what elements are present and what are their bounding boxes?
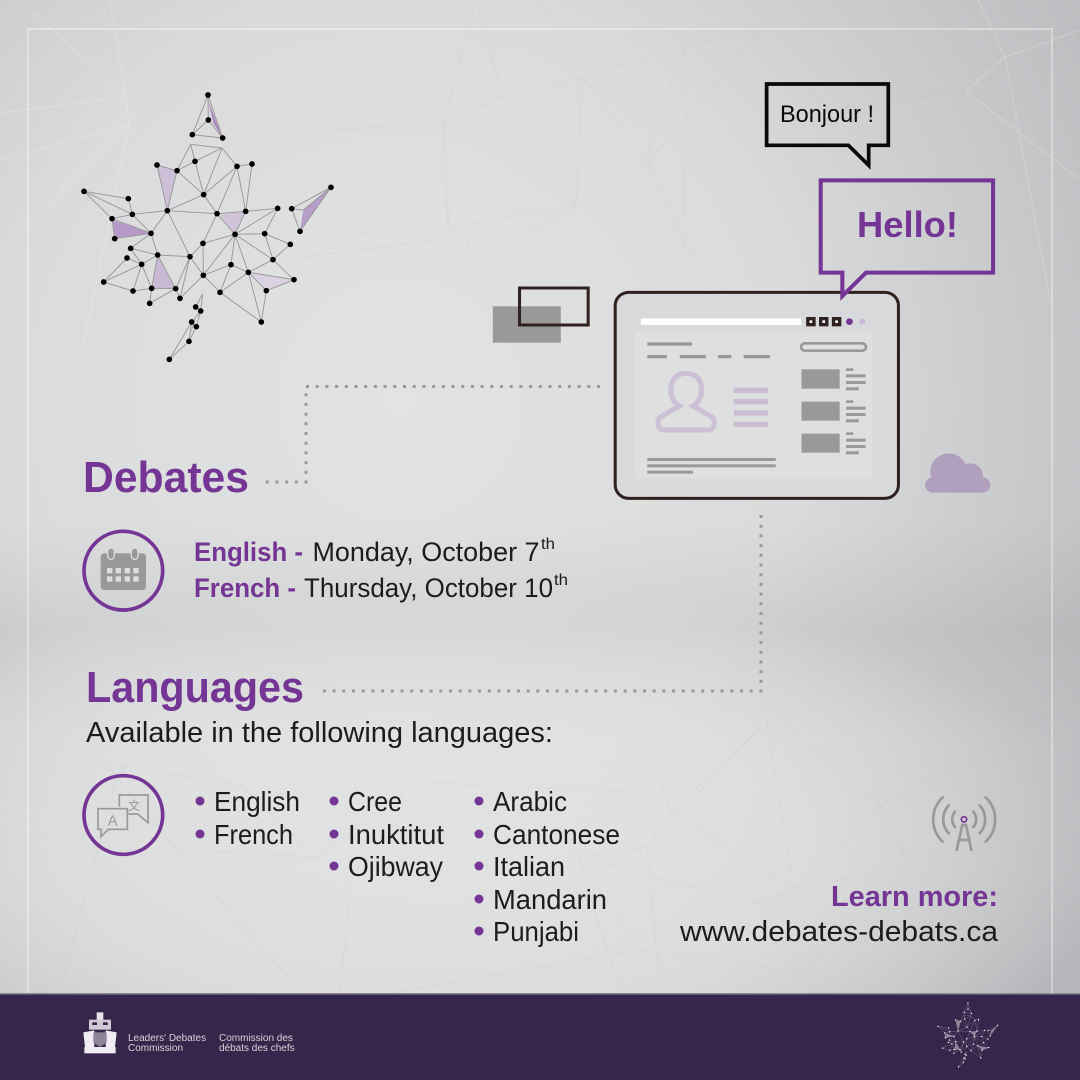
icon: network maple leaf	[81, 92, 334, 362]
icon: coat of arms	[83, 1012, 117, 1053]
dotted connector: debates to tablet	[265, 386, 600, 482]
debate dates: French -	[194, 573, 296, 603]
debate dates: English -	[194, 537, 303, 567]
speech bubble: Bonjour	[767, 84, 888, 165]
heading: Languages: Languages	[86, 663, 304, 712]
languages intro: Available in the following languages:	[86, 717, 553, 749]
learn more: www.debates-debats.ca	[679, 916, 999, 948]
debate dates: th	[541, 536, 555, 553]
icon: translation bubbles	[84, 776, 163, 854]
language list: column two: Inuktitut	[348, 819, 444, 850]
language list: column one: French	[214, 819, 293, 850]
speech bubble: Hello	[821, 180, 993, 296]
language list: column three: Punjabi	[493, 916, 579, 947]
language list: column three: Cantonese	[493, 819, 620, 850]
commission name: French	[219, 1033, 295, 1054]
icon: overlapping rectangles	[493, 288, 588, 343]
language list: column two: Cree	[348, 786, 402, 817]
language list: column two: Ojibway	[348, 851, 443, 882]
commission name: French: débats des chefs	[219, 1043, 295, 1054]
icon: broadcast antenna	[933, 797, 995, 850]
language list: column three	[474, 786, 620, 947]
language list: column three: Mandarin	[493, 884, 607, 915]
icon: translation bubbles: A	[108, 813, 118, 829]
icon: cloud	[925, 453, 990, 493]
language list: column two	[330, 786, 444, 882]
icon: calendar	[84, 531, 163, 610]
heading: Debates: Debates	[83, 453, 249, 502]
debate dates	[194, 536, 568, 603]
learn more	[679, 881, 999, 948]
debate dates: Thursday, October 10	[304, 573, 553, 603]
commission name: English	[128, 1033, 206, 1054]
icon: translation bubbles: 文	[128, 798, 140, 813]
icon: footer maple leaf	[937, 1002, 998, 1068]
language list: column one: English	[214, 786, 300, 817]
commission name: French: Commission des	[219, 1033, 293, 1044]
debate dates: Monday, October 7	[312, 537, 540, 567]
language list: column three: Arabic	[493, 786, 567, 817]
learn more: Learn more:	[831, 881, 998, 913]
footer band	[0, 993, 1080, 1080]
commission name: English: Leaders' Debates	[128, 1033, 206, 1044]
dotted connector: languages to tablet	[322, 515, 761, 691]
commission name: English: Commission	[128, 1043, 183, 1054]
language list: column three: Italian	[493, 851, 565, 882]
debate dates: th	[554, 572, 568, 589]
speech bubble: Bonjour: Bonjour !	[780, 101, 874, 128]
tablet illustration	[615, 292, 898, 498]
language list: column one	[196, 786, 300, 850]
speech bubble: Hello: Hello!	[857, 204, 958, 245]
